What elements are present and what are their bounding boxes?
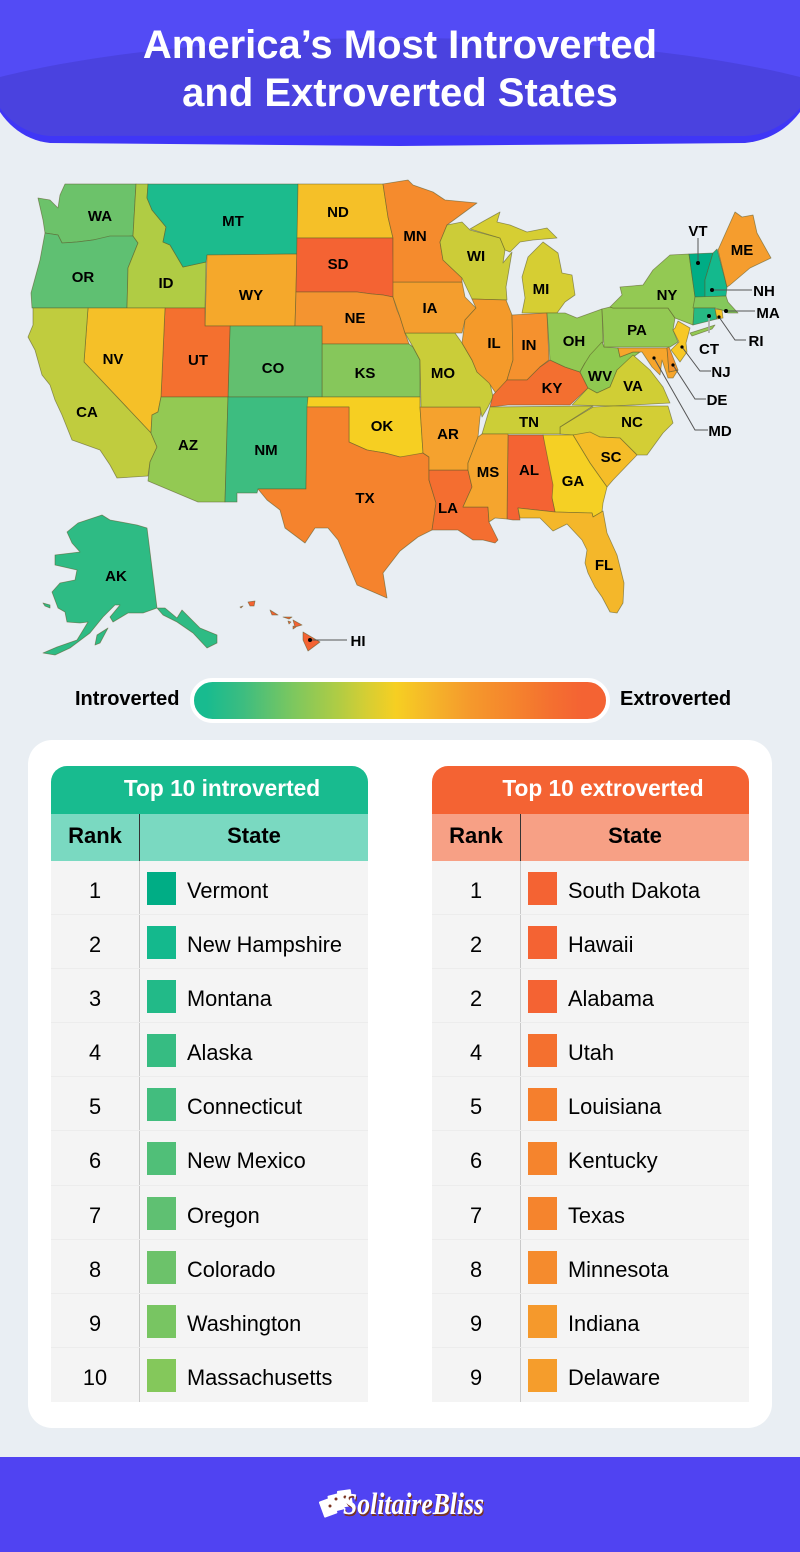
state labels: NH [753, 283, 775, 300]
state labels: NJ [711, 364, 731, 381]
state labels: MA [756, 305, 780, 322]
column headers: extroverted: Rank [449, 823, 503, 848]
icon: playing cards [319, 1489, 353, 1518]
state labels: IL [487, 335, 501, 352]
state labels: CA [76, 404, 98, 421]
state: AR [420, 407, 482, 470]
state: NJ [671, 321, 690, 362]
state labels: TX [355, 490, 375, 507]
state: CA [28, 308, 157, 478]
table: top 10 extroverted: Alabama [568, 986, 654, 1011]
state: NY [610, 254, 715, 336]
state: UT [161, 308, 230, 397]
column headers: extroverted [432, 814, 749, 861]
state: PA [602, 307, 678, 347]
state: RI [715, 309, 723, 319]
state: KS [322, 344, 420, 397]
state: OH [547, 309, 603, 372]
title: America’s Most Introverted [143, 23, 657, 67]
state: FL [518, 508, 624, 613]
state: MO [405, 333, 493, 417]
state labels: AZ [178, 437, 198, 454]
state labels: NM [254, 442, 278, 459]
table: top 10 introverted: 5 [89, 1094, 101, 1119]
column headers: introverted: State [227, 823, 281, 848]
table: top 10 extroverted: Indiana [568, 1311, 640, 1336]
state: NH [705, 249, 727, 297]
title: and Extroverted States [182, 71, 618, 115]
state: IN [507, 313, 549, 380]
table: top 10 introverted: Oregon [187, 1203, 260, 1228]
state: TX [258, 407, 436, 598]
table: top 10 introverted: 2 [89, 932, 101, 957]
state: MA [693, 296, 738, 313]
state labels [72, 204, 780, 650]
state labels: GA [562, 473, 584, 490]
table: top 10 extroverted [432, 766, 749, 1402]
table: top 10 extroverted: South Dakota [568, 878, 700, 903]
state: KY [490, 360, 588, 407]
table: top 10 extroverted: Louisiana [568, 1094, 661, 1119]
state: OR [31, 233, 138, 308]
state: ID [127, 184, 206, 308]
state labels: MN [403, 228, 427, 245]
state labels: ME [731, 242, 753, 259]
table: top 10 introverted: Washington [187, 1311, 301, 1336]
state labels: CO [262, 360, 285, 377]
table: top 10 extroverted: 2 [470, 986, 482, 1011]
state: DE [667, 347, 678, 372]
state labels: OH [563, 333, 585, 350]
state: NM [225, 397, 308, 502]
state: OK [307, 397, 423, 457]
state: AL [507, 435, 555, 520]
table: top 10 introverted: New Mexico [187, 1148, 306, 1173]
table: top 10 extroverted: Hawaii [568, 932, 633, 957]
state: WA [38, 184, 136, 243]
state: AZ [148, 397, 228, 502]
table: top 10 extroverted: 9 [470, 1311, 482, 1336]
table: top 10 extroverted: 4 [470, 1040, 482, 1065]
table: top 10 introverted: Alaska [187, 1040, 252, 1065]
state labels: MI [533, 281, 549, 298]
state labels: IN [522, 337, 536, 354]
table: top 10 introverted: Colorado [187, 1257, 275, 1282]
state labels: NE [345, 310, 365, 327]
table: top 10 introverted: New Hampshire [187, 932, 342, 957]
table: top 10 extroverted: Minnesota [568, 1257, 669, 1282]
table: top 10 introverted: 10 [83, 1365, 107, 1390]
state labels: MO [431, 365, 455, 382]
state: CT [693, 308, 717, 325]
table: top 10 introverted: Connecticut [187, 1094, 302, 1119]
state labels: DE [707, 392, 727, 409]
state labels: NC [621, 414, 643, 431]
state labels: FL [595, 557, 613, 574]
state: SC [573, 432, 637, 487]
title [143, 23, 657, 115]
state labels: ID [158, 275, 174, 292]
column headers: introverted [51, 814, 368, 861]
state: MD [618, 348, 678, 378]
table: top 10 extroverted: Kentucky [568, 1148, 658, 1173]
table: top 10 introverted: 7 [89, 1203, 101, 1228]
state: IA [393, 282, 476, 333]
state labels: WA [88, 208, 112, 225]
state: MT [147, 184, 298, 267]
state: SD [296, 238, 394, 297]
table: top 10 extroverted: Utah [568, 1040, 614, 1065]
tables card [28, 740, 772, 1428]
state: WI [440, 222, 512, 300]
state labels: VT [688, 223, 708, 240]
state labels: WI [467, 248, 485, 265]
state labels: VA [623, 378, 643, 395]
header banner [0, 0, 800, 146]
state: ND [297, 184, 393, 238]
table: top 10 introverted: 8 [89, 1257, 101, 1282]
state: ME [718, 212, 771, 287]
table: top 10 introverted [51, 766, 368, 1402]
table: top 10 extroverted: 8 [470, 1257, 482, 1282]
table: top 10 extroverted: 1 [470, 878, 482, 903]
state: WV [580, 342, 640, 393]
table heading: extroverted [432, 766, 749, 814]
column headers: introverted: Rank [68, 823, 122, 848]
state labels: OK [371, 418, 393, 435]
state labels: SD [328, 256, 349, 273]
state: IL [462, 299, 513, 395]
state labels: MS [477, 464, 499, 481]
state labels: NY [657, 287, 677, 304]
state labels: KS [355, 365, 375, 382]
leader lines [310, 238, 755, 640]
table: top 10 introverted: 3 [89, 986, 101, 1011]
leader dots [308, 261, 728, 642]
state: AK [43, 515, 217, 655]
table: top 10 extroverted: Delaware [568, 1365, 660, 1390]
state labels: WY [239, 287, 263, 304]
state: WY [205, 254, 297, 326]
state: GA [543, 435, 607, 517]
table: top 10 extroverted: 9 [470, 1365, 482, 1390]
state labels: KY [542, 380, 562, 397]
state: MS [463, 434, 508, 522]
state labels: AR [437, 426, 459, 443]
state: HI [240, 601, 320, 651]
state: VT [689, 253, 713, 297]
table: top 10 introverted: Massachusetts [187, 1365, 332, 1390]
state labels: LA [438, 500, 458, 517]
state: MN [383, 180, 477, 282]
legend label: introverted: Introverted [75, 688, 179, 710]
state labels: UT [188, 352, 208, 369]
state labels: OR [72, 269, 94, 286]
state labels: WV [588, 368, 612, 385]
state labels: NV [103, 351, 123, 368]
state labels: HI [350, 633, 366, 650]
table heading: extroverted: Top 10 extroverted [502, 775, 704, 801]
legend gradient bar [190, 678, 610, 723]
table: top 10 introverted: 9 [89, 1311, 101, 1336]
state labels: SC [601, 449, 622, 466]
state labels: MT [222, 213, 244, 230]
state: TN [482, 406, 593, 434]
state labels: AK [105, 568, 127, 585]
table: top 10 introverted: 6 [89, 1148, 101, 1173]
state labels: CT [699, 341, 719, 358]
state: NE [295, 292, 409, 344]
table: top 10 extroverted: 5 [470, 1094, 482, 1119]
table: top 10 introverted: 4 [89, 1040, 101, 1065]
state labels: AL [519, 462, 539, 479]
legend label: extroverted: Extroverted [620, 688, 731, 710]
footer band [0, 1457, 800, 1552]
state: NV [84, 308, 165, 433]
state labels: MD [708, 423, 732, 440]
state: NC [560, 406, 673, 455]
table: top 10 introverted: Vermont [187, 878, 268, 903]
state: VA [572, 355, 670, 406]
state labels: IA [422, 300, 438, 317]
table: top 10 extroverted: 6 [470, 1148, 482, 1173]
state: LA [429, 470, 498, 543]
table heading: introverted: Top 10 introverted [124, 775, 320, 801]
table: top 10 extroverted: Texas [568, 1203, 625, 1228]
logo: Solitaire Bliss [319, 1486, 485, 1523]
column headers: extroverted: State [608, 823, 662, 848]
state: CO [228, 326, 322, 397]
state labels: RI [748, 333, 764, 350]
state labels: PA [627, 322, 647, 339]
table heading: introverted [51, 766, 368, 814]
state labels: TN [519, 414, 539, 431]
table: top 10 extroverted: 2 [470, 932, 482, 957]
table: top 10 introverted: Montana [187, 986, 272, 1011]
state labels: ND [327, 204, 349, 221]
table: top 10 introverted: 1 [89, 878, 101, 903]
US map [28, 180, 780, 656]
state: MI [470, 212, 575, 313]
table: top 10 extroverted: 7 [470, 1203, 482, 1228]
